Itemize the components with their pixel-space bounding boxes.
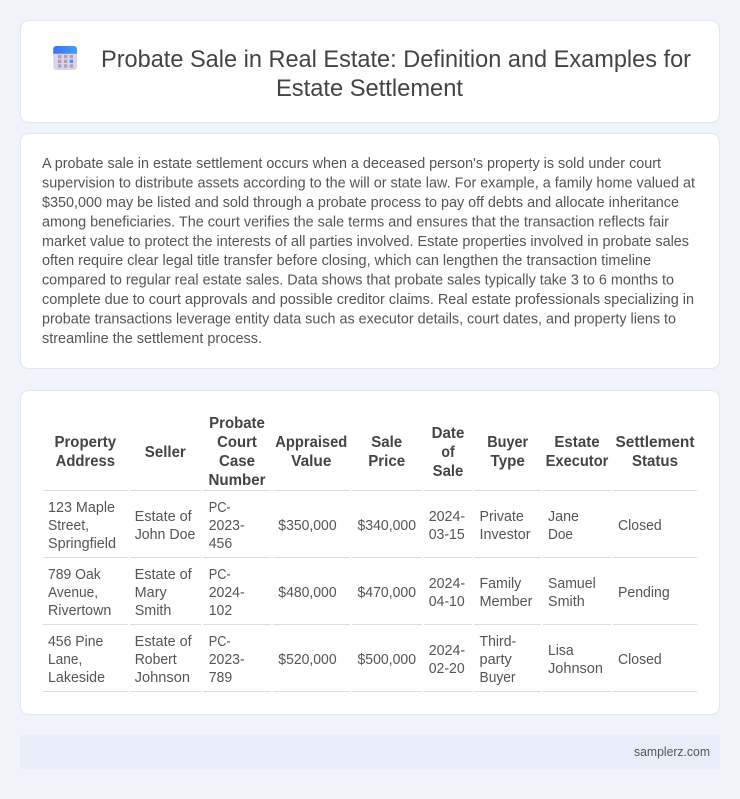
- table row: 123 Maple Street: Springfield: [48, 536, 116, 552]
- table row: 456 Pine Lane: Johnson: [548, 661, 603, 677]
- panel: description: [20, 134, 720, 368]
- table row: 789 Oak Avenue: Samuel: [548, 576, 596, 592]
- table header row: of: [441, 444, 455, 461]
- table row: 789 Oak Avenue: Pending: [618, 585, 670, 601]
- table row: 123 Maple Street: John Doe: [135, 527, 195, 543]
- icon: calendar: [53, 46, 77, 70]
- table row: 789 Oak Avenue: Member: [480, 594, 533, 610]
- table row: 456 Pine Lane: PC-: [209, 634, 231, 650]
- table header row: Estate: [554, 434, 600, 451]
- table row: 456 Pine Lane: Buyer: [480, 670, 516, 686]
- table row: 789 Oak Avenue: [48, 567, 670, 619]
- table header row: Settlement: [616, 434, 695, 451]
- table row: 456 Pine Lane: Third-: [480, 634, 516, 650]
- table header row: [54, 415, 695, 489]
- footer text: samplerz.com: [634, 744, 710, 759]
- table row: 789 Oak Avenue: Mary: [135, 585, 167, 601]
- text block: probate sale description: A probate sale in estate settlement occurs when a deceased person's property is sold under court: [42, 156, 661, 172]
- table row: 789 Oak Avenue: Avenue,: [48, 585, 98, 601]
- table header row: Case: [219, 453, 255, 470]
- table row: 456 Pine Lane: Lakeside: [48, 670, 105, 686]
- title: [101, 46, 691, 102]
- table row: 789 Oak Avenue: Rivertown: [48, 603, 111, 619]
- table row: 456 Pine Lane: Estate of: [135, 634, 193, 650]
- table row: 456 Pine Lane: $520,000: [278, 652, 337, 668]
- table row: 456 Pine Lane: 456 Pine: [48, 634, 103, 650]
- table row: 789 Oak Avenue: Family: [480, 576, 522, 592]
- title: Estate Settlement: [276, 75, 463, 102]
- table row: 456 Pine Lane: Johnson: [135, 670, 190, 686]
- table header row: Buyer: [487, 434, 528, 451]
- text block: probate sale description: supervision to distribute assets according to the will or state law. For example, a family home valued at: [42, 175, 695, 191]
- table row: 456 Pine Lane: Robert: [135, 652, 177, 668]
- table row: 456 Pine Lane: 2023-: [209, 652, 245, 668]
- table row: 123 Maple Street: Private: [480, 509, 524, 525]
- table header row: Sale: [433, 463, 463, 480]
- text block: probate sale description: streamline the settlement process.: [42, 331, 262, 347]
- table header row: Executor: [546, 453, 608, 470]
- table row: 456 Pine Lane: Closed: [618, 652, 662, 668]
- table row: 123 Maple Street: Street,: [48, 518, 89, 534]
- table header row: Price: [368, 453, 405, 470]
- table row: 456 Pine Lane: $500,000: [358, 652, 416, 668]
- table row: 123 Maple Street: $340,000: [358, 518, 416, 534]
- table row: 789 Oak Avenue: Estate of: [135, 567, 193, 583]
- table row: 123 Maple Street: $350,000: [278, 518, 337, 534]
- text block: probate sale description: complete due to court approvals and possible creditor claims. Real estate professionals specializing in: [42, 292, 694, 308]
- table header row: Property: [54, 434, 116, 451]
- table header row: Appraised: [275, 434, 347, 451]
- table row: 456 Pine Lane: party: [480, 652, 513, 668]
- panel: probate sales table: [20, 390, 720, 714]
- table row: 456 Pine Lane: Lisa: [548, 643, 574, 659]
- panel: title card: [20, 20, 720, 122]
- table row: 123 Maple Street: 2024-: [429, 509, 465, 525]
- table row: 789 Oak Avenue: $480,000: [278, 585, 337, 601]
- table row: 123 Maple Street: Estate of: [135, 509, 193, 525]
- table row: 456 Pine Lane: 02-20: [429, 661, 465, 677]
- title: Probate Sale in Real Estate: Definition and Examples for: [101, 46, 691, 73]
- table row: 789 Oak Avenue: 2024-: [429, 576, 465, 592]
- table row: 789 Oak Avenue: 04-10: [429, 594, 465, 610]
- text block: probate sale description: often require clear legal title transfer before closing, which can lengthen the transaction timeline: [42, 253, 651, 269]
- table row: 789 Oak Avenue: Smith: [548, 594, 585, 610]
- table header row: Number: [208, 472, 266, 489]
- table row: 789 Oak Avenue: 2024-: [209, 585, 245, 601]
- table row: 123 Maple Street: [48, 500, 662, 552]
- table header row: Probate: [209, 415, 265, 432]
- table row: 456 Pine Lane: 789: [209, 670, 232, 686]
- table row: 123 Maple Street: PC-: [209, 500, 231, 516]
- table row: 456 Pine Lane: 2024-: [429, 643, 465, 659]
- text block: probate sale description: [42, 156, 695, 347]
- table header row: Date: [432, 425, 464, 442]
- text block: probate sale description: among beneficiaries. The court verifies the sale terms and ensures that the transaction reflects fair: [42, 214, 669, 230]
- table row: 789 Oak Avenue: Smith: [135, 603, 171, 619]
- table row: 789 Oak Avenue: 789 Oak: [48, 567, 101, 583]
- table row: 123 Maple Street: 123 Maple: [48, 500, 115, 516]
- text block: probate sale description: probate transactions leverage entity data such as executor details, court dates, and property liens to: [42, 312, 676, 328]
- table header row: Status: [632, 453, 678, 470]
- table row: 123 Maple Street: Investor: [480, 527, 531, 543]
- table row: 456 Pine Lane: Lane,: [48, 652, 82, 668]
- table row: 123 Maple Street: Jane: [548, 509, 579, 525]
- table header row: Value: [291, 453, 332, 470]
- table row: 123 Maple Street: 03-15: [429, 527, 465, 543]
- text block: probate sale description: $350,000 may be listed and sold through a probate process to pay off debts and allocate inheritance: [42, 195, 679, 211]
- text block: probate sale description: compared to regular real estate sales. Data shows that probate sales typically take 3 to 6 months to: [42, 273, 674, 289]
- table row: 123 Maple Street: 456: [209, 536, 232, 552]
- table header row: Type: [491, 453, 525, 470]
- table header row: Court: [217, 434, 257, 451]
- table row: 456 Pine Lane: [48, 634, 662, 686]
- table row: 789 Oak Avenue: PC-: [209, 567, 231, 583]
- table header row: Sale: [371, 434, 402, 451]
- table header row: Seller: [145, 444, 186, 461]
- table header row: Address: [56, 453, 115, 470]
- footer bar: [20, 735, 720, 769]
- table row: 123 Maple Street: Closed: [618, 518, 662, 534]
- table row: 789 Oak Avenue: 102: [209, 603, 232, 619]
- table row: 123 Maple Street: 2023-: [209, 518, 245, 534]
- table row: 123 Maple Street: Doe: [548, 527, 573, 543]
- table row: 789 Oak Avenue: $470,000: [358, 585, 416, 601]
- text block: probate sale description: market value to protect the interests of all parties involved. Estate properties involved in probate sales: [42, 234, 689, 250]
